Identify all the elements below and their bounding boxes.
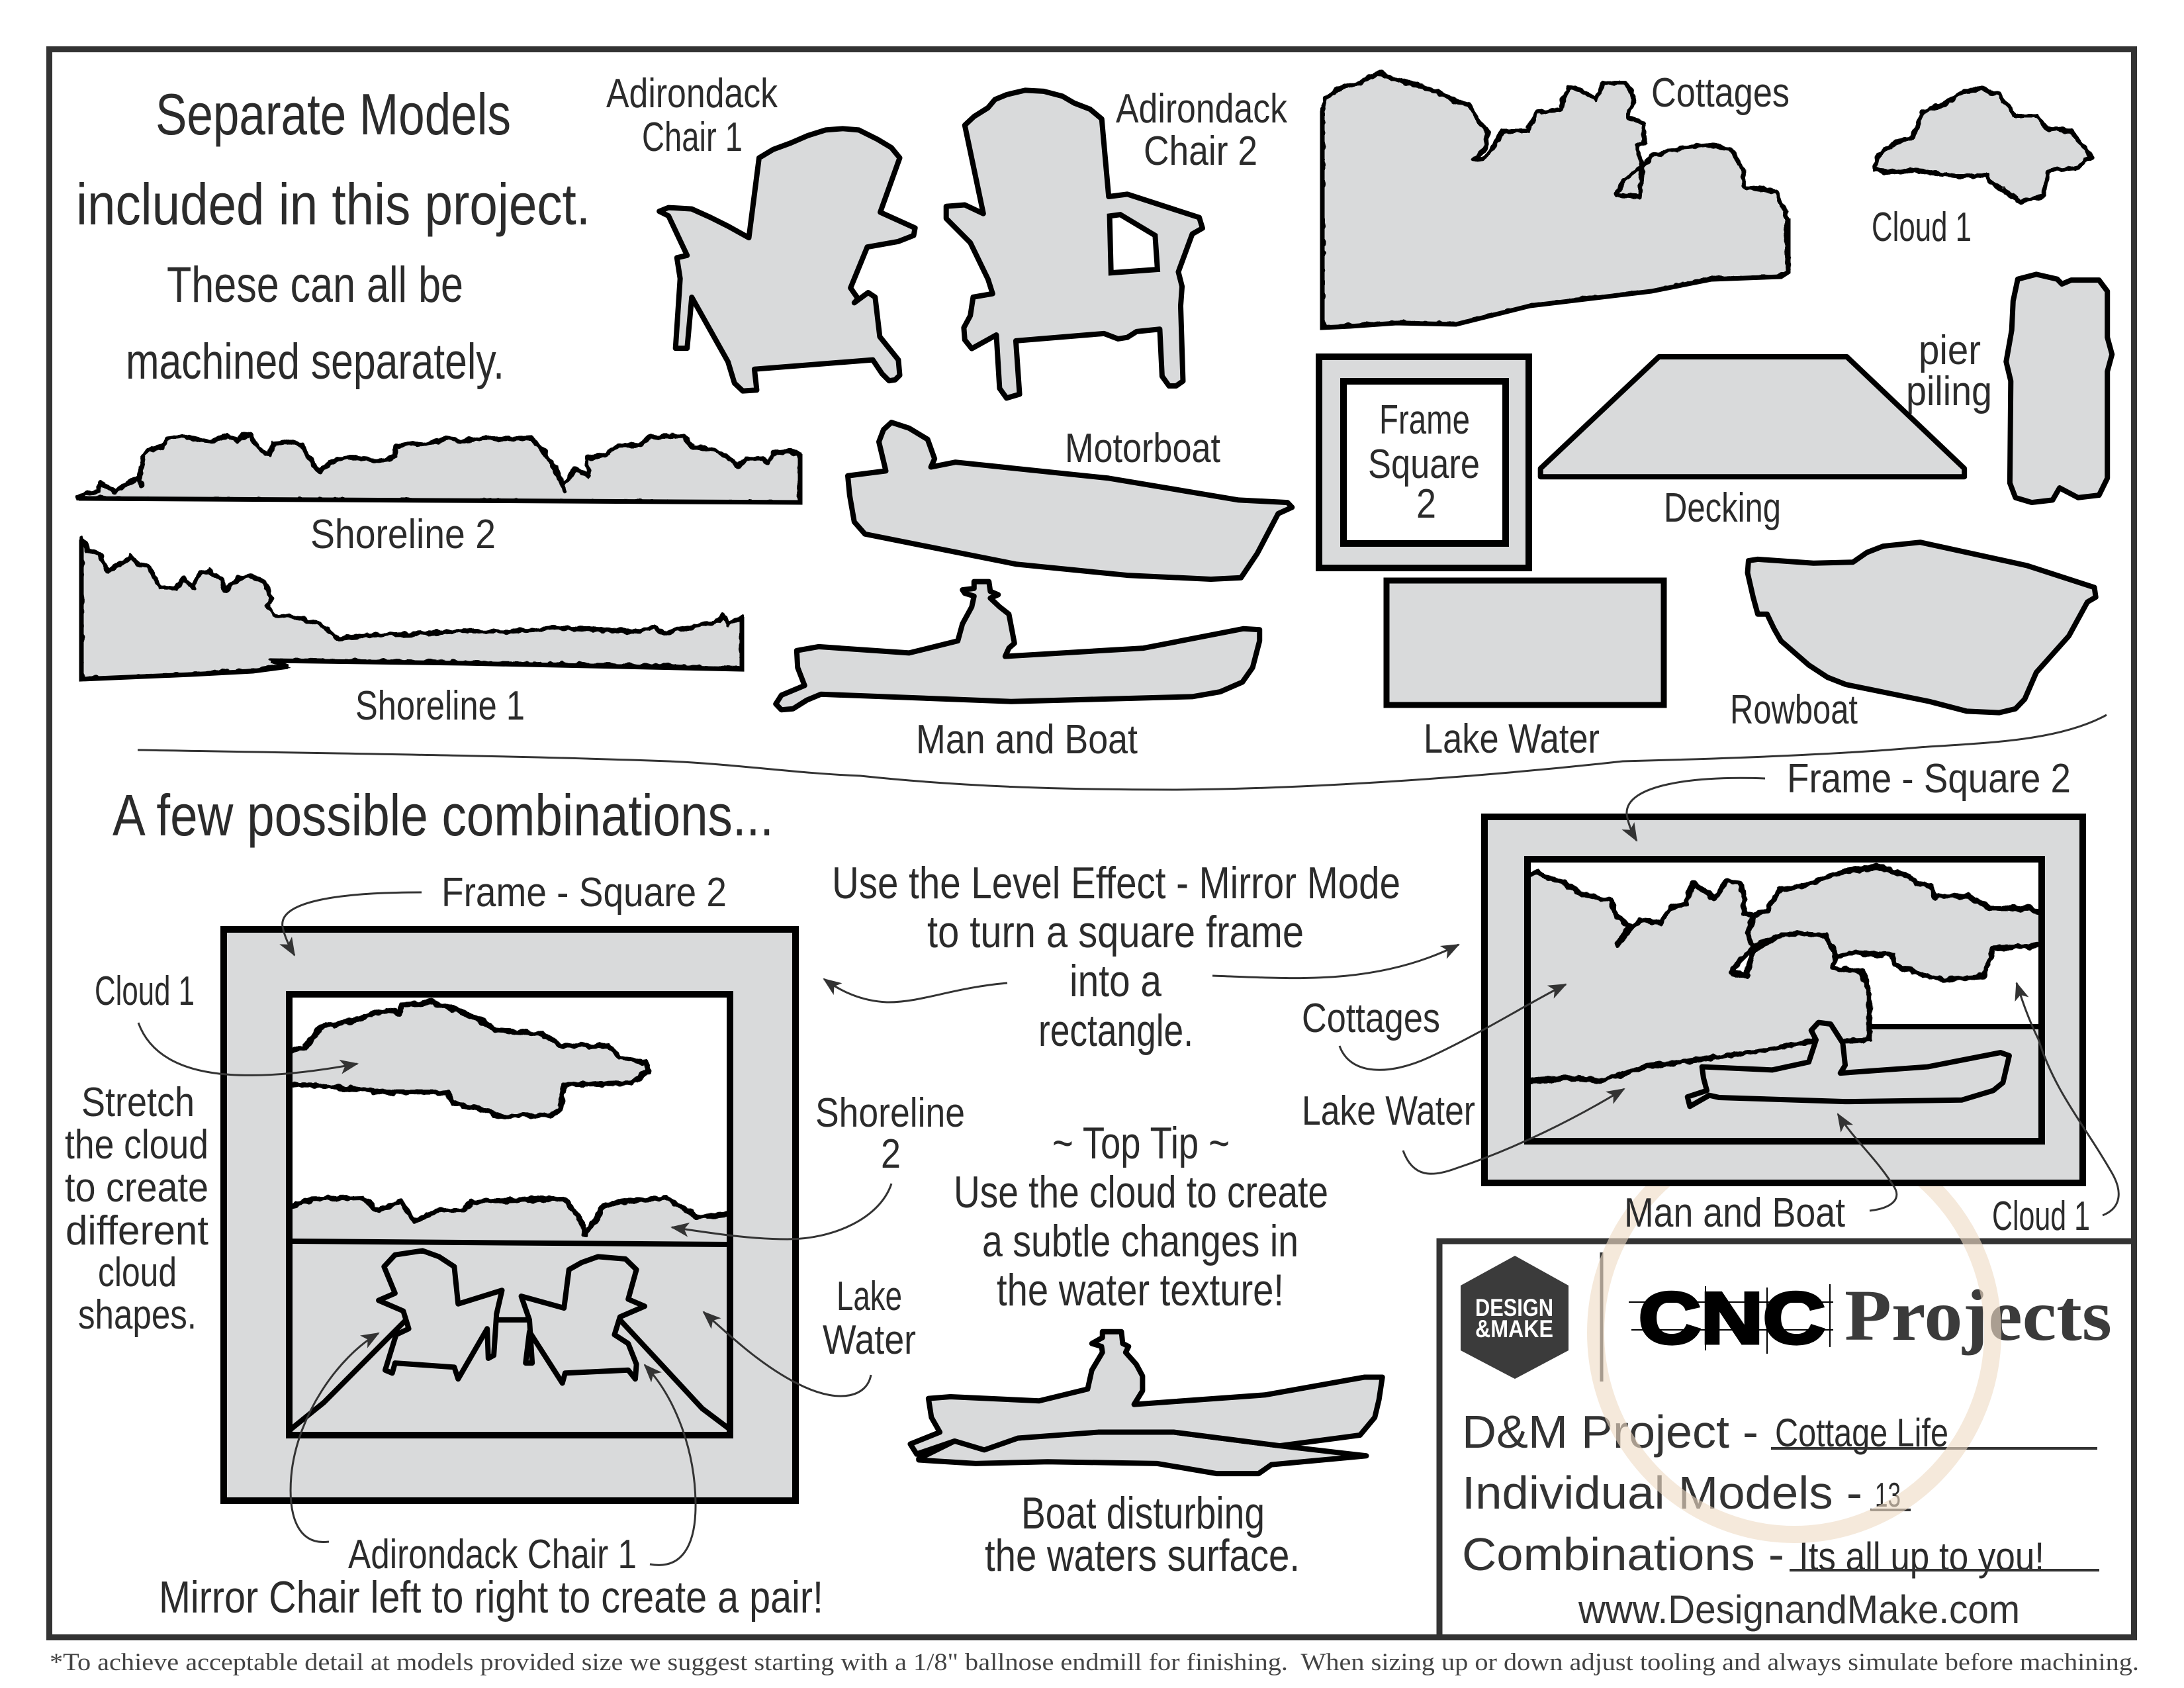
field: combinations <box>1462 1528 2099 1580</box>
note: top tip: a subtle changes in <box>982 1216 1298 1266</box>
note: stretch the cloud: Stretch <box>81 1080 195 1125</box>
logo: cnc projects: CNC <box>1639 1278 1825 1359</box>
scene horizon line <box>1870 1024 2042 1029</box>
model: adirondack chair 2 <box>946 86 1288 398</box>
model: adirondack chair 1: Adirondack <box>606 71 778 117</box>
scene window <box>1527 859 2042 1141</box>
model: shoreline 1 <box>81 539 742 729</box>
label: cottages with arrow: Cottages <box>1302 996 1440 1041</box>
label: man and boat with arrow <box>1624 1114 1897 1236</box>
model: cottages: Cottages <box>1651 70 1790 116</box>
illustration: boat disturbing the water: the waters surface. <box>985 1530 1300 1581</box>
label: frame square 2 with arrow: Frame - Square 2 <box>441 870 727 915</box>
illustration: boat disturbing the water <box>910 1332 1383 1581</box>
model: man and boat <box>776 582 1259 763</box>
note: stretch the cloud: to create <box>65 1165 208 1211</box>
label: shoreline 2 with arrow <box>672 1090 965 1239</box>
model: rowboat <box>1730 542 2096 733</box>
label: frame square 2 with arrow, right <box>1627 756 2071 841</box>
model: decking <box>1541 357 1964 531</box>
model: rowboat: Rowboat <box>1730 687 1858 733</box>
field: project name: D&M Project - <box>1462 1406 1758 1458</box>
field: individual models: Individual Models - <box>1462 1467 1862 1519</box>
heading: separate models: machined separately. <box>126 334 504 390</box>
combination: square frame with chairs <box>224 929 796 1501</box>
model: pier piling: piling <box>1906 369 1992 414</box>
model: adirondack chair 1: Chair 1 <box>642 115 743 160</box>
coffee ring stain <box>1596 1131 1993 1534</box>
heading: separate models: These can all be <box>167 257 463 313</box>
note: mirror mode with arrows <box>824 858 1459 1056</box>
label: lake water with arrow: Lake <box>837 1274 902 1319</box>
field: project name: Cottage Life <box>1775 1411 1948 1455</box>
label: shoreline 2 with arrow: Shoreline <box>815 1090 965 1136</box>
model: cloud 1 <box>1872 88 2091 250</box>
title block <box>1439 1241 2134 1638</box>
heading: separate models <box>76 81 590 390</box>
scene cloud and cottages <box>1515 867 2054 1081</box>
scene window <box>289 994 730 1435</box>
model: decking: Decking <box>1664 485 1781 531</box>
label: cloud 1 with arrow, right <box>1992 983 2118 1239</box>
model: shoreline 1: Shoreline 1 <box>355 683 525 729</box>
note: stretch the cloud: shapes. <box>78 1292 197 1338</box>
note: mirror mode with arrows: to turn a square frame <box>927 907 1304 957</box>
label: frame square 2 with arrow, right: Frame - Square 2 <box>1787 756 2071 802</box>
label: man and boat with arrow: Man and Boat <box>1624 1190 1845 1236</box>
model: frame square 2: Square <box>1368 442 1480 487</box>
note: top tip: ~ Top Tip ~ <box>1052 1118 1230 1168</box>
model: adirondack chair 2: Adirondack <box>1116 86 1288 132</box>
combination: rectangle frame with cottages <box>1484 817 2083 1183</box>
model: adirondack chair 1 <box>606 71 915 391</box>
logo: cnc projects: Projects <box>1844 1275 2112 1356</box>
model: man and boat: Man and Boat <box>916 717 1138 763</box>
note: mirror mode with arrows: rectangle. <box>1038 1006 1193 1056</box>
label: lake water with arrow: Water <box>823 1317 916 1363</box>
field: individual models: 13 <box>1875 1476 1901 1515</box>
field: project name <box>1462 1406 2097 1458</box>
icon: design and make hexagon logo: DESIGN <box>1475 1294 1553 1321</box>
scene cloud and shoreline <box>280 1002 741 1252</box>
scene chairs and decking <box>291 1250 730 1429</box>
model: lake water <box>1387 581 1664 762</box>
note: mirror mode with arrows: into a <box>1069 956 1161 1006</box>
model: pier piling: pier <box>1919 328 1981 373</box>
model: cottages <box>1322 70 1790 328</box>
model: shoreline 2 <box>79 433 800 557</box>
label: cloud 1 with arrow <box>95 968 357 1075</box>
model: motorboat: Motorboat <box>1065 426 1220 471</box>
label: lake water with arrow <box>704 1274 916 1396</box>
note: top tip <box>954 1118 1328 1315</box>
label: adirondack chair 1 with arrows: Adirondack Chair 1 <box>348 1532 637 1577</box>
label: adirondack chair 1 with arrows: Mirror Chair left to right to create a pair! <box>159 1572 823 1622</box>
field: combinations: Its all up to you! <box>1799 1534 2044 1579</box>
scene horizon line <box>289 1241 730 1244</box>
model: frame square 2: 2 <box>1416 481 1436 527</box>
scene lake water <box>289 1243 730 1435</box>
model: lake water: Lake Water <box>1424 716 1600 762</box>
field: combinations: Combinations - <box>1462 1528 1784 1580</box>
note: top tip: Use the cloud to create <box>954 1167 1328 1217</box>
model: pier piling <box>1906 274 2112 502</box>
frame square <box>224 929 796 1501</box>
model: cloud 1: Cloud 1 <box>1872 205 1972 250</box>
heading: separate models: Separate Models <box>156 81 511 147</box>
icon: design and make hexagon logo <box>1461 1256 1569 1379</box>
model: frame square 2: Frame <box>1379 397 1470 443</box>
heading: separate models: included in this project. <box>76 171 590 237</box>
model: shoreline 2: Shoreline 2 <box>310 512 496 557</box>
label: frame square 2 with arrow <box>283 870 727 955</box>
scene lake water <box>1527 1027 2042 1141</box>
label: cloud 1 with arrow: Cloud 1 <box>95 968 195 1014</box>
logo: cnc projects <box>1629 1275 2112 1359</box>
label: lake water with arrow, right <box>1302 1088 1624 1174</box>
note: stretch the cloud: the cloud <box>65 1122 208 1168</box>
scene man and boat <box>1688 1023 2009 1106</box>
label: cloud 1 with arrow, right: Cloud 1 <box>1992 1194 2090 1239</box>
note: mirror mode with arrows: Use the Level Effect - Mirror Mode <box>832 858 1400 908</box>
model: adirondack chair 2: Chair 2 <box>1144 128 1257 174</box>
footnote: *To achieve acceptable detail at models provided size we suggest starting with a 1/8" ballnose endmill for finishing. When sizing up or down adjust tooling and always simulate before machining. <box>50 1649 2139 1676</box>
label: shoreline 2 with arrow: 2 <box>881 1131 901 1177</box>
note: stretch the cloud: cloud <box>98 1250 177 1295</box>
frame rectangle <box>1484 817 2083 1183</box>
label: adirondack chair 1 with arrows <box>159 1333 823 1622</box>
heading: possible combinations: A few possible combinations... <box>113 782 774 848</box>
note: top tip: the water texture! <box>997 1265 1284 1315</box>
model: motorboat <box>848 422 1292 579</box>
title block border <box>1439 1241 2134 1638</box>
note: stretch the cloud <box>65 1080 208 1338</box>
website: www.DesignandMake.com <box>1578 1587 2020 1632</box>
note: stretch the cloud: different <box>66 1208 208 1254</box>
illustration: boat disturbing the water: Boat disturbing <box>1021 1488 1265 1538</box>
label: cottages with arrow <box>1302 984 1566 1070</box>
label: lake water with arrow, right: Lake Water <box>1302 1088 1475 1134</box>
model: frame square 2 <box>1319 357 1529 568</box>
icon: design and make hexagon logo: &MAKE <box>1475 1315 1553 1342</box>
